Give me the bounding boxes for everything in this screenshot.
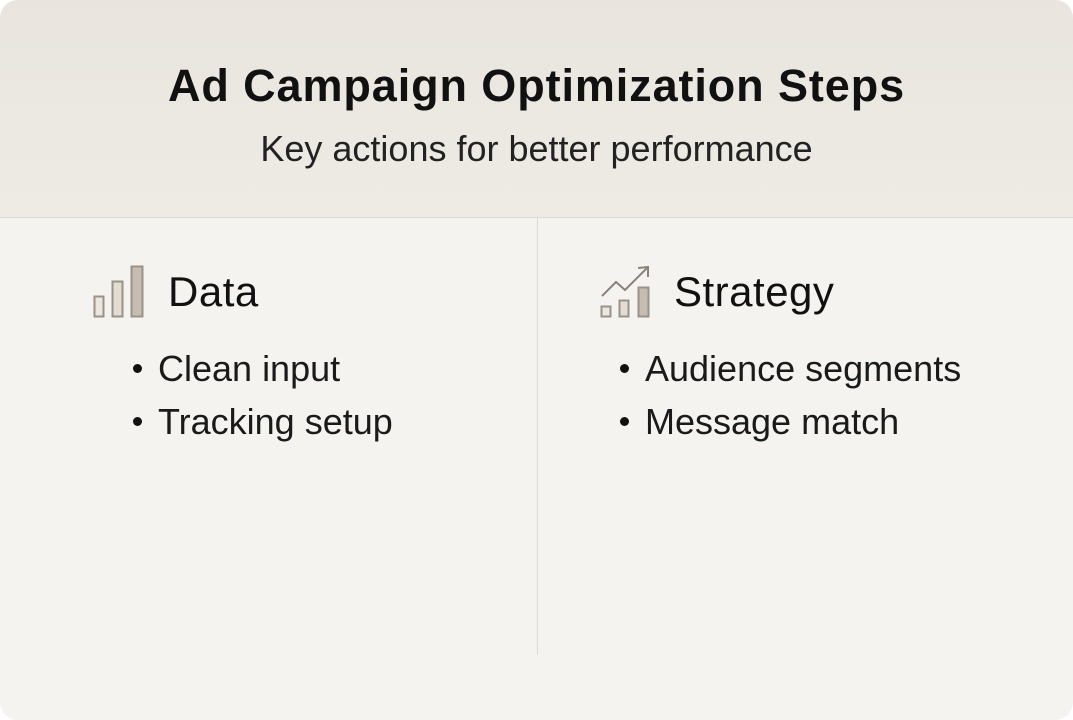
- panel: data: [94, 266, 393, 442]
- header band: [0, 0, 1073, 218]
- heading: Data: Data: [168, 268, 259, 315]
- icon: bar chart: [94, 266, 144, 318]
- panel: strategy: [600, 266, 961, 442]
- heading: Strategy: Strategy: [674, 268, 834, 315]
- title: Ad Campaign Optimization Steps: [168, 60, 905, 111]
- icon: growth chart: [600, 266, 650, 318]
- bullet: audience segments: Audience segments: [645, 348, 961, 389]
- bullet: clean input: Clean input: [158, 348, 340, 389]
- subtitle: Key actions for better performance: [260, 128, 813, 169]
- bullet: tracking setup: Tracking setup: [158, 401, 393, 442]
- bullet: message match: Message match: [645, 401, 899, 442]
